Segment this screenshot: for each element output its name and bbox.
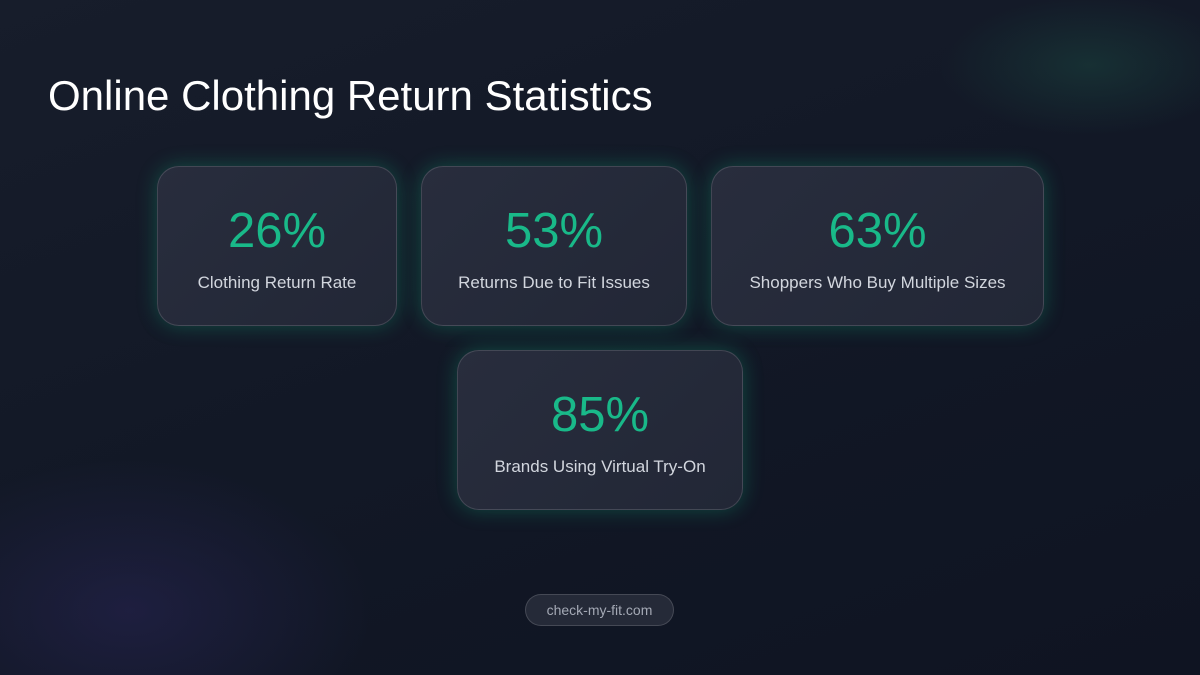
stat number: 26%: [228, 204, 326, 258]
stat label: Brands Using Virtual Try-On: [494, 457, 706, 476]
card: fit issues: [421, 166, 687, 326]
stat label: Clothing Return Rate: [198, 273, 356, 292]
card: clothing return rate: [157, 166, 397, 326]
card: virtual try-on: [457, 350, 743, 510]
stat number: 85%: [551, 388, 649, 442]
footer pill: website: [525, 594, 674, 626]
card: multiple sizes: [711, 166, 1044, 326]
stat label: Returns Due to Fit Issues: [458, 273, 650, 292]
title: Online Clothing Return Statistics: [48, 72, 653, 119]
stat number: 53%: [505, 204, 603, 258]
footer pill: website: check-my-fit.com: [547, 602, 652, 618]
stat number: 63%: [828, 204, 927, 258]
stat label: Shoppers Who Buy Multiple Sizes: [749, 273, 1006, 292]
